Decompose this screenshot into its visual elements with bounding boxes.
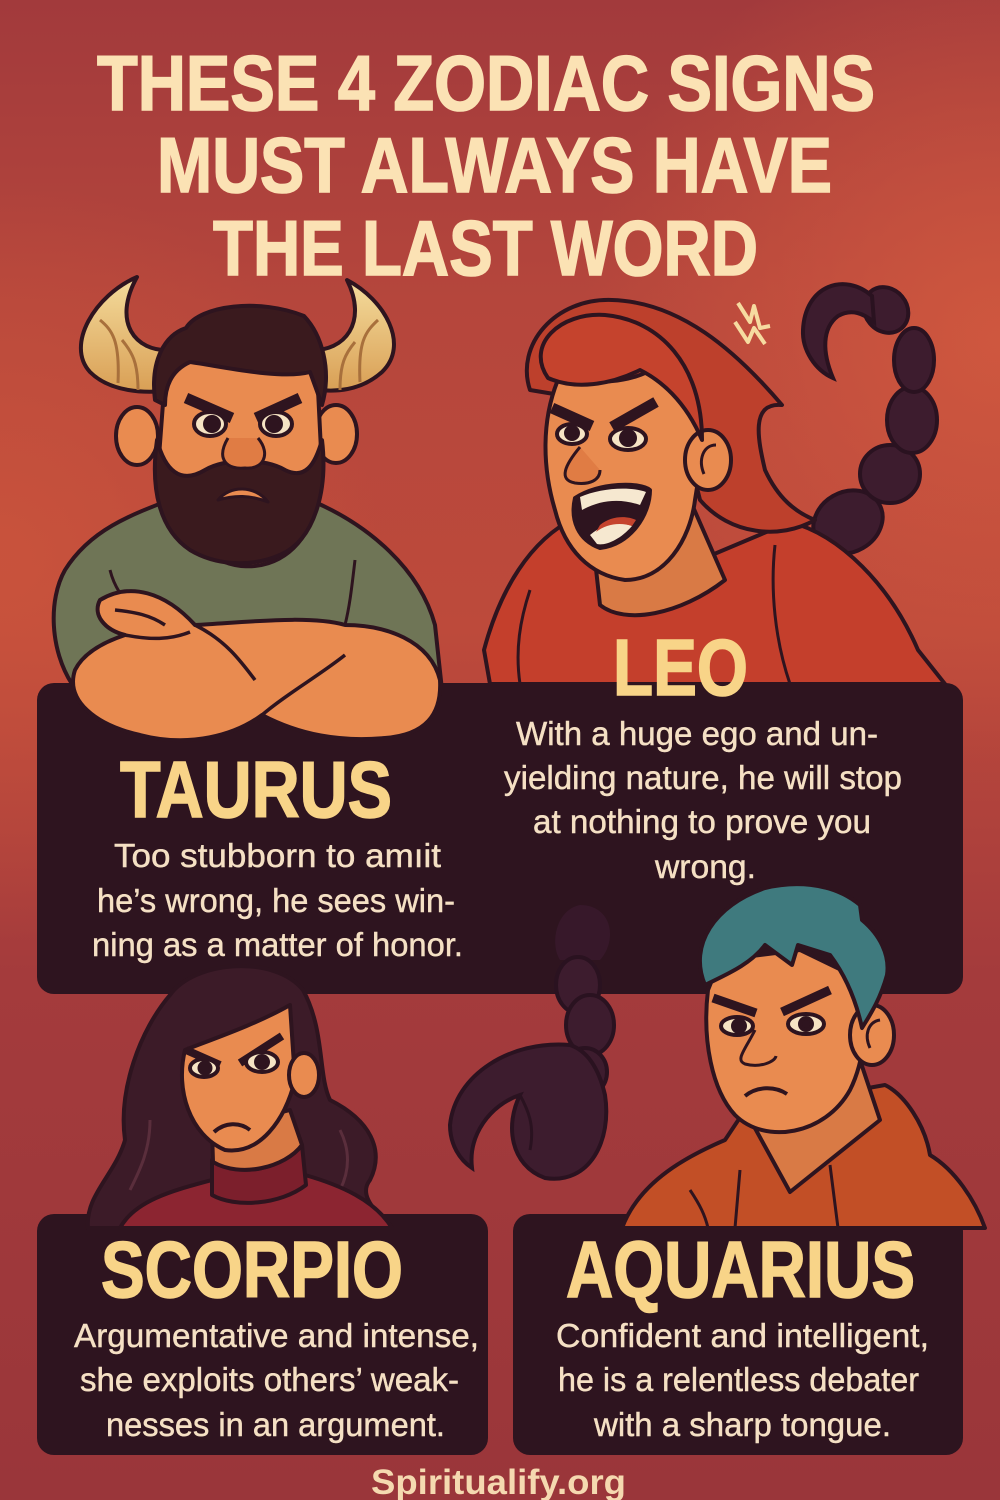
text: Scorpio description: Argumentative and intense, xyxy=(74,1317,479,1354)
text: Taurus description: Too stubborn to amıit xyxy=(114,837,441,874)
Taurus eyes xyxy=(194,412,292,436)
heading: Aquarius: AQUARIUS xyxy=(566,1225,915,1314)
Taurus pupils xyxy=(205,417,281,431)
text: Scorpio description: nesses in an argument. xyxy=(106,1406,445,1443)
text: Aquarius description: he is a relentless debater xyxy=(558,1361,919,1398)
text: Aquarius description: with a sharp tongue. xyxy=(593,1406,891,1443)
illustration: Aquarius figure xyxy=(622,884,985,1228)
panel: Taurus and Leo xyxy=(37,683,963,994)
Leo pupils xyxy=(566,427,635,445)
Aquarius hair xyxy=(700,884,888,1028)
Taurus horn left ridges xyxy=(100,320,138,390)
Taurus neck xyxy=(180,460,315,566)
Scorpio hair strands xyxy=(130,1120,348,1190)
text: Leo description: With a huge ego and un- xyxy=(516,715,878,752)
panel: Scorpio xyxy=(37,1214,488,1455)
text: Leo description: at nothing to prove you xyxy=(533,803,871,840)
Leo nose xyxy=(565,447,600,483)
Taurus horn right xyxy=(308,280,394,391)
Aquarius ear xyxy=(850,1005,894,1065)
illustration: Taurus figure xyxy=(54,277,442,740)
Aquarius drawstrings xyxy=(690,1165,838,1228)
Aquarius hoodie xyxy=(622,1085,985,1228)
Taurus mouth xyxy=(218,489,268,502)
heading: Leo: LEO xyxy=(613,623,748,712)
text: Aquarius description xyxy=(556,1317,929,1443)
Scorpio mouth xyxy=(214,1124,250,1132)
Leo eyes xyxy=(557,424,646,450)
Taurus arm fold xyxy=(115,610,345,715)
Taurus brows xyxy=(186,398,300,418)
Leo neck xyxy=(595,500,725,615)
Taurus face xyxy=(158,350,322,524)
Taurus beard xyxy=(155,440,323,563)
icon: anger mark xyxy=(735,303,770,344)
Aquarius ear inner xyxy=(867,1020,880,1048)
Scorpio hair back xyxy=(88,966,390,1228)
text: Leo description: yielding nature, he will stop xyxy=(504,759,902,796)
text: Leo description xyxy=(504,715,902,885)
Taurus sleeve seams xyxy=(110,560,355,625)
Leo hair front xyxy=(541,315,702,440)
Taurus horn right ridges xyxy=(340,320,378,390)
Taurus arms xyxy=(73,591,440,740)
Aquarius nose xyxy=(741,1030,776,1065)
text: Aquarius description: Confident and intelligent, xyxy=(556,1317,929,1354)
Scorpio brows xyxy=(186,1036,282,1065)
title xyxy=(97,39,875,292)
Leo mouth xyxy=(574,485,650,548)
Leo brows xyxy=(552,402,656,427)
centre tail notch xyxy=(520,1095,532,1150)
Taurus shirt xyxy=(54,498,442,690)
Aquarius brows xyxy=(713,990,830,1013)
Leo shirt xyxy=(484,518,945,684)
title: THE LAST WORD xyxy=(213,204,758,292)
Scorpio eyes xyxy=(190,1052,278,1077)
title: THESE 4 ZODIAC SIGNS xyxy=(97,39,875,127)
text: Leo description: wrong. xyxy=(654,848,756,885)
Aquarius eyes xyxy=(721,1014,824,1035)
Aquarius neck xyxy=(745,1060,880,1192)
Taurus nose xyxy=(223,438,265,468)
Leo face xyxy=(545,365,701,580)
panel: Aquarius xyxy=(513,1214,963,1455)
Taurus horn left xyxy=(81,277,172,392)
Leo hair back xyxy=(527,300,815,532)
text: Taurus description: ning as a matter of honor. xyxy=(92,926,463,963)
Leo sleeve seams xyxy=(518,545,790,684)
text: Scorpio description xyxy=(74,1317,479,1443)
Taurus ears xyxy=(116,405,357,465)
Aquarius mouth xyxy=(745,1088,787,1096)
Scorpio pupils xyxy=(200,1056,268,1074)
illustration: Leo figure xyxy=(484,300,945,684)
heading: Scorpio: SCORPIO xyxy=(101,1225,403,1314)
illustration: scorpion tail centre xyxy=(450,905,614,1179)
Scorpio face xyxy=(182,1005,295,1150)
Aquarius face xyxy=(706,950,865,1132)
Leo ear xyxy=(685,430,731,490)
Scorpio turtleneck xyxy=(212,1145,306,1203)
text: Taurus description: he’s wrong, he sees win- xyxy=(97,882,455,919)
heading: Taurus: TAURUS xyxy=(120,745,392,834)
Scorpio neck xyxy=(212,1110,302,1170)
Taurus hair xyxy=(154,306,326,405)
Leo tongue xyxy=(596,517,636,532)
Leo ear inner xyxy=(701,445,716,474)
illustration: scorpion tail behind Leo xyxy=(802,278,937,566)
illustration: Scorpio figure xyxy=(88,966,392,1228)
Leo teeth xyxy=(580,489,646,544)
Scorpio sweater xyxy=(120,1175,392,1228)
title: MUST ALWAYS HAVE xyxy=(157,121,832,209)
Scorpio ear xyxy=(289,1053,319,1097)
text: Taurus description xyxy=(92,837,463,963)
Aquarius pupils xyxy=(733,1018,812,1032)
text: Scorpio description: she exploits others’ weak- xyxy=(80,1361,459,1398)
